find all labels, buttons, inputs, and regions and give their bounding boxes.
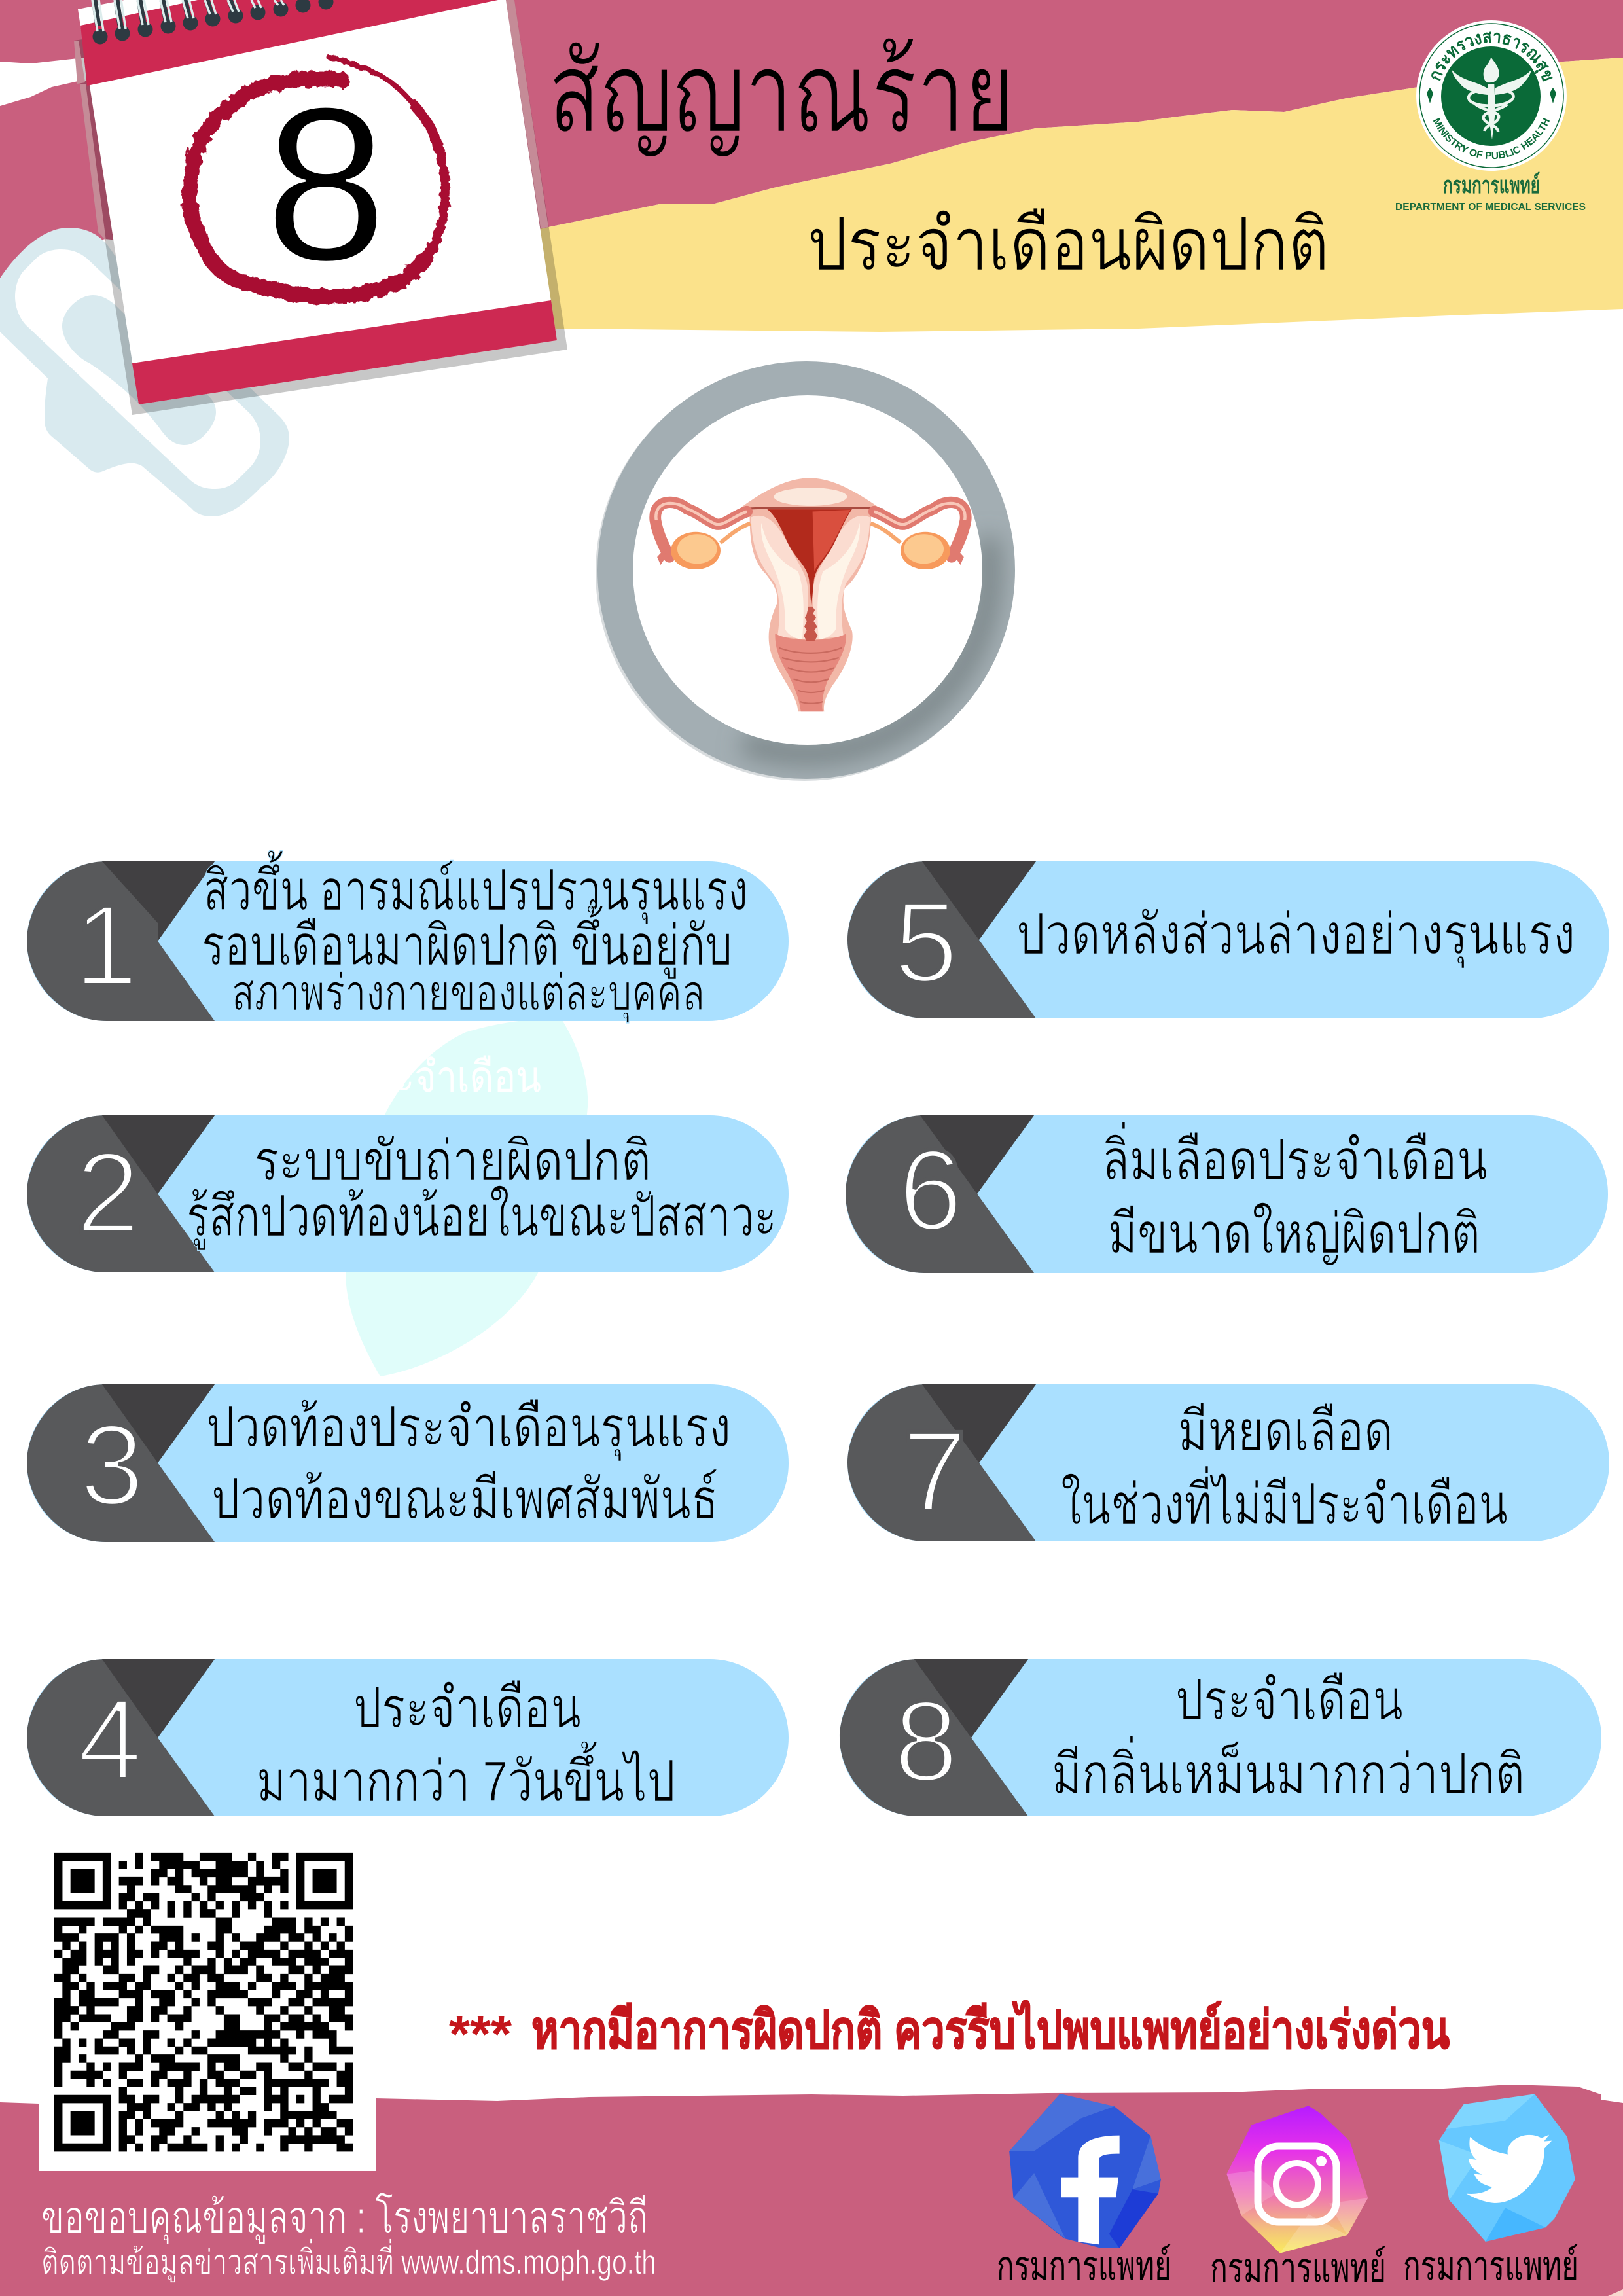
text lines [1052,1669,1525,1806]
number 7: 7 [902,1408,967,1536]
text lines: มามากกว่า 7วันขึ้นไป [257,1741,675,1813]
calendar page [78,0,557,404]
text lines: ประจำเดือน [1175,1669,1403,1732]
footer website: ติดตามข้อมูลข่าวสารเพิ่มเติมที่ www.dms.moph.go.th [41,2238,656,2283]
icon: facebook [1009,2094,1161,2248]
calendar [74,0,567,415]
calendar shadow [74,0,567,415]
text lines: ลิ่มเลือดประจำเดือน [1102,1121,1488,1192]
text lines: มีขนาดใหญ่ผิดปกติ [1108,1202,1480,1266]
big number 8: 8 [265,62,387,306]
watermark leaf behind pills [346,1019,588,1376]
faint watermark text: ะจำเดือน [395,1052,541,1101]
text lines: ปวดท้องขณะมีเพศสัมพันธ์ [211,1468,719,1531]
number 8: 8 [894,1677,958,1806]
background: white torn strip [0,52,144,106]
pill 6 [846,1115,1608,1273]
uterus illustration in ring [596,361,1015,781]
pill 2 [27,1115,789,1272]
ring [596,361,1015,781]
number 1: 1 [74,882,138,1010]
icon: uterus [655,478,966,711]
text lines [257,1677,675,1813]
icon: instagram [1226,2106,1368,2253]
text lines: สภาพร่างกายของแต่ละบุคคล [232,965,705,1023]
pill 1 [27,850,789,1023]
text lines: สิวขึ้น อารมณ์แปรปรวนรุนแรง [204,850,748,925]
text lines: มีหยดเลือด [1178,1400,1393,1463]
pill 4 [27,1659,789,1816]
calendar spiral rings [92,0,334,45]
right tube and ovary [870,502,966,569]
footer pink torn band [0,2085,1623,2296]
text lines: ระบบขับถ่ายผิดปกติ [254,1130,651,1193]
title: สัญญาณร้าย: สัญญาณร้าย [548,30,1014,157]
logo: Ministry of Public Health: กระทรวงสาธารณสุข [1431,31,1552,82]
footer corner accent [1608,2289,1623,2296]
icon: sanitary pad [0,228,289,516]
subtitle: ประจำเดือนผิดปกติ: ประจำเดือนผิดปกติ [808,204,1329,285]
footer credit: ขอขอบคุณข้อมูลจาก : โรงพยาบาลราชวิถี [41,2192,648,2244]
text lines [1061,1400,1508,1536]
left tube and ovary [655,502,751,569]
background: top pink torn band [0,0,1623,281]
pill 7 [847,1384,1609,1541]
hand-drawn red circle [190,57,445,296]
pill 3 [27,1384,789,1542]
QR code [39,1837,376,2171]
text lines: รอบเดือนมาผิดปกติ ขึ้นอยู่กับ [202,905,732,980]
logo: Ministry of Public Health [1395,20,1586,213]
text lines [206,1396,731,1531]
calendar bottom red band [132,300,557,404]
logo: Ministry of Public Health: MINISTRY OF PUBLIC HEALTH [1433,118,1550,160]
text lines: ปวดท้องประจำเดือนรุนแรง [206,1396,731,1462]
number 4: 4 [78,1676,142,1804]
text lines: ประจำเดือน [353,1677,581,1740]
text lines [1102,1121,1488,1266]
label: facebook: กรมการแพทย์ [997,2244,1171,2289]
warning callout: *** [449,2005,512,2063]
text lines: มีกลิ่นเหม็นมากกว่าปกติ [1052,1735,1525,1806]
icon: twitter [1439,2094,1575,2242]
calendar top red band [80,0,498,86]
text lines [202,850,748,1023]
logo caption Thai: กรมการแพทย์ [1443,171,1540,198]
number 2: 2 [76,1129,140,1257]
label: instagram: กรมการแพทย์ [1210,2246,1386,2291]
number 5: 5 [894,878,958,1007]
background: yellow torn band [510,58,1623,332]
pill 8 [840,1659,1601,1816]
number 3: 3 [80,1401,144,1530]
pill 5 [847,861,1609,1018]
text lines [187,1130,777,1251]
number 6: 6 [899,1126,963,1255]
text lines: รู้สึกปวดท้องน้อยในขณะปัสสาวะ [187,1185,777,1251]
logo caption English: DEPARTMENT OF MEDICAL SERVICES [1395,202,1586,213]
